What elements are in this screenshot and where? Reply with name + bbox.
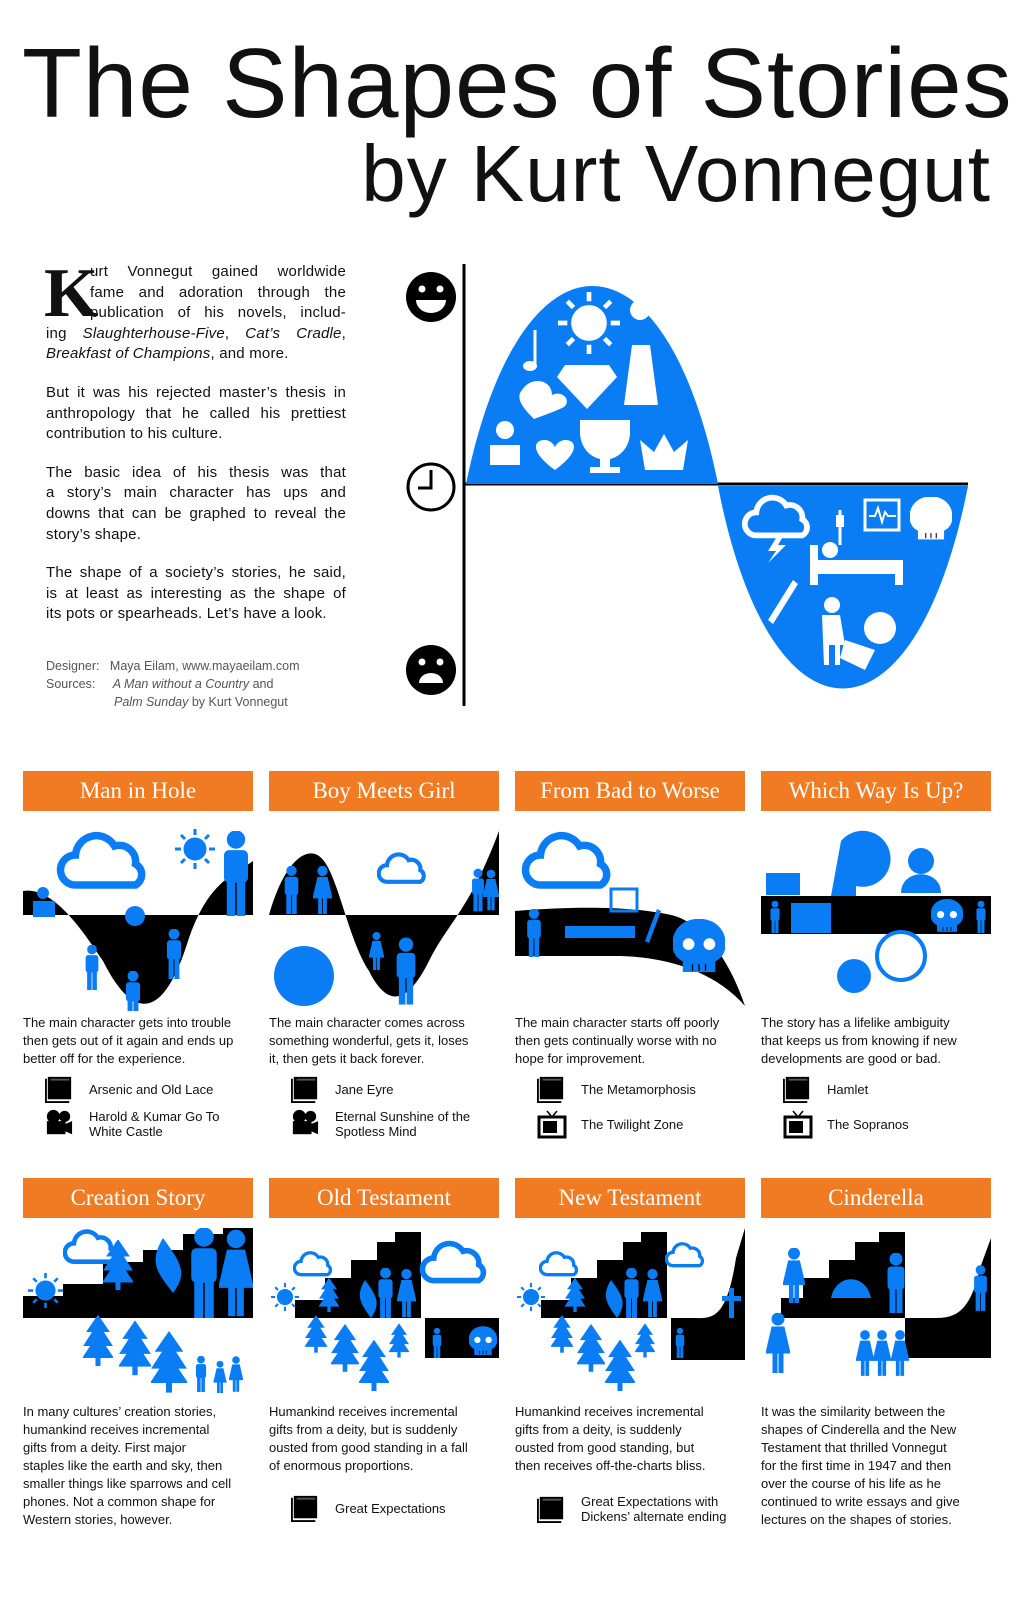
intro text: The shape of a society’s stories, he said, bbox=[46, 564, 346, 581]
heading: Boy Meets Girl bbox=[312, 778, 456, 803]
chart bbox=[761, 830, 991, 993]
description: something wonderful, gets it, loses bbox=[269, 1033, 468, 1048]
heading: From Bad to Worse bbox=[540, 778, 720, 803]
description: The story has a lifelike ambiguity bbox=[761, 1015, 950, 1030]
media list bbox=[537, 1076, 696, 1138]
description: ousted from good standing in a fall bbox=[269, 1440, 468, 1455]
description: shapes of Cinderella and the New bbox=[761, 1422, 956, 1437]
media list bbox=[537, 1494, 726, 1524]
description bbox=[515, 1404, 706, 1473]
icon: happy face bbox=[406, 272, 456, 322]
heading bbox=[515, 1178, 745, 1218]
heading bbox=[23, 771, 253, 811]
description bbox=[23, 1015, 233, 1066]
intro text: K bbox=[44, 255, 99, 332]
media list: Arsenic and Old Lace bbox=[89, 1082, 213, 1096]
description: continued to write essays and give bbox=[761, 1494, 960, 1509]
chart bbox=[766, 1232, 991, 1376]
chart bbox=[271, 1232, 499, 1391]
heading bbox=[761, 771, 991, 811]
media list: The Metamorphosis bbox=[581, 1082, 696, 1096]
intro text: a story’s main character has ups and bbox=[46, 484, 346, 501]
credits: Sources: A Man without a Country and bbox=[46, 677, 273, 691]
intro text: fame and adoration through the bbox=[90, 284, 346, 301]
media list: Eternal Sunshine of the bbox=[335, 1109, 470, 1124]
media list bbox=[291, 1076, 470, 1139]
description bbox=[761, 1404, 960, 1527]
media list: Great Expectations with bbox=[581, 1494, 718, 1509]
description: then receives off-the-charts bliss. bbox=[515, 1458, 706, 1473]
intro text: publication of his novels, includ- bbox=[90, 304, 346, 321]
panel: Old Testament bbox=[269, 1178, 499, 1522]
media list bbox=[783, 1076, 909, 1138]
subtitle: by Kurt Vonnegut bbox=[361, 129, 991, 218]
description: better off for the experience. bbox=[23, 1051, 185, 1066]
media list: Harold & Kumar Go To bbox=[89, 1109, 220, 1124]
chart bbox=[23, 1228, 253, 1393]
intro text: urt Vonnegut gained worldwide bbox=[90, 263, 346, 280]
description: lectures on the shapes of stories. bbox=[761, 1512, 952, 1527]
description: Humankind receives incremental bbox=[269, 1404, 458, 1419]
heading bbox=[515, 771, 745, 811]
intro text: But it was his rejected master’s thesis in bbox=[46, 384, 346, 401]
media list: White Castle bbox=[89, 1124, 163, 1139]
chart bbox=[517, 1228, 745, 1391]
description: gifts from a deity, but is suddenly bbox=[269, 1422, 457, 1437]
description: then gets out of it again and ends up bbox=[23, 1033, 233, 1048]
panel: New Testament bbox=[515, 1178, 745, 1524]
description: then gets continually worse with no bbox=[515, 1033, 717, 1048]
panel: Creation Story bbox=[23, 1178, 253, 1527]
heading: Man in Hole bbox=[80, 778, 196, 803]
credits bbox=[46, 659, 300, 709]
curve: good fortune bbox=[466, 286, 718, 484]
intro text: downs that can be graphed to reveal the bbox=[46, 505, 346, 522]
intro text: The basic idea of his thesis was that bbox=[46, 464, 346, 481]
icon: clock bbox=[408, 464, 454, 510]
icons: positive bbox=[490, 292, 688, 473]
description: developments are good or bad. bbox=[761, 1051, 941, 1066]
media list: The Twilight Zone bbox=[581, 1116, 683, 1132]
heading: Creation Story bbox=[71, 1185, 205, 1210]
panel: Which Way Is Up? bbox=[761, 771, 991, 1138]
description: It was the similarity between the bbox=[761, 1404, 945, 1419]
intro text bbox=[44, 255, 346, 622]
description: The main character gets into trouble bbox=[23, 1015, 231, 1030]
description: The main character comes across bbox=[269, 1015, 465, 1030]
heading: New Testament bbox=[559, 1185, 701, 1210]
description: gifts from a deity. First major bbox=[23, 1440, 186, 1455]
description: Testament that thrilled Vonnegut bbox=[761, 1440, 947, 1455]
heading: Old Testament bbox=[317, 1185, 451, 1210]
heading: Cinderella bbox=[828, 1185, 924, 1210]
description: The main character starts off poorly bbox=[515, 1015, 719, 1030]
heading bbox=[269, 771, 499, 811]
curve: ill fortune bbox=[718, 486, 968, 688]
credits: Designer: Maya Eilam, www.mayaeilam.com bbox=[46, 659, 300, 673]
description bbox=[23, 1404, 231, 1527]
media list: Spotless Mind bbox=[335, 1124, 417, 1139]
description: smaller things like sparrows and cell bbox=[23, 1476, 231, 1491]
media list: Great Expectations bbox=[335, 1500, 446, 1516]
chart bbox=[515, 832, 745, 1006]
description: hope for improvement. bbox=[515, 1051, 645, 1066]
description: phones. Not a common shape for bbox=[23, 1494, 215, 1509]
intro text: is at least as interesting as the shape of bbox=[46, 585, 346, 602]
intro text: anthropology that he called his prettiest bbox=[46, 405, 346, 422]
title: The Shapes of Stories bbox=[22, 28, 1013, 138]
description: Humankind receives incremental bbox=[515, 1404, 704, 1419]
axis bbox=[464, 264, 968, 706]
chart bbox=[23, 829, 253, 1011]
media list bbox=[45, 1076, 220, 1139]
description: over the course of his life as he bbox=[761, 1476, 941, 1491]
media list: Dickens’ alternate ending bbox=[581, 1509, 726, 1524]
panel: From Bad to Worse bbox=[515, 771, 745, 1138]
description: for the first time in 1947 and then bbox=[761, 1458, 951, 1473]
intro text: contribution to his culture. bbox=[46, 425, 223, 442]
description: that keeps us from knowing if new bbox=[761, 1033, 957, 1048]
description: it, then gets it back forever. bbox=[269, 1051, 424, 1066]
heading: Which Way Is Up? bbox=[789, 778, 963, 803]
heading bbox=[761, 1178, 991, 1218]
description: gifts from a deity, is suddenly bbox=[515, 1422, 682, 1437]
media list: Hamlet bbox=[827, 1082, 868, 1096]
panel: Man in Hole bbox=[23, 771, 253, 1139]
icon: sad face bbox=[406, 645, 456, 695]
description: of enormous proportions. bbox=[269, 1458, 414, 1473]
media list bbox=[291, 1496, 446, 1522]
media list: The Sopranos bbox=[827, 1116, 909, 1132]
description bbox=[515, 1015, 720, 1066]
intro text: its pots or spearheads. Let’s have a look. bbox=[46, 605, 327, 622]
intro text: Breakfast of Champions, and more. bbox=[46, 345, 289, 362]
media list: Jane Eyre bbox=[335, 1082, 394, 1096]
description: staples like the earth and sky, then bbox=[23, 1458, 222, 1473]
credits: Palm Sunday by Kurt Vonnegut bbox=[114, 695, 288, 709]
description bbox=[761, 1015, 957, 1066]
description: humankind receives incremental bbox=[23, 1422, 209, 1437]
panel: Boy Meets Girl bbox=[269, 771, 499, 1139]
description: ousted from good standing, but bbox=[515, 1440, 694, 1455]
panel: Cinderella bbox=[761, 1178, 991, 1527]
description bbox=[269, 1404, 468, 1473]
intro text: ing Slaughterhouse-Five, Cat’s Cradle, bbox=[46, 325, 346, 342]
heading bbox=[23, 1178, 253, 1218]
description: In many cultures’ creation stories, bbox=[23, 1404, 216, 1419]
heading bbox=[269, 1178, 499, 1218]
chart bbox=[269, 831, 499, 1006]
description bbox=[269, 1015, 468, 1066]
description: Western stories, however. bbox=[23, 1512, 172, 1527]
main chart bbox=[406, 264, 968, 706]
intro text: story’s shape. bbox=[46, 526, 141, 543]
icons: negative bbox=[745, 497, 952, 670]
